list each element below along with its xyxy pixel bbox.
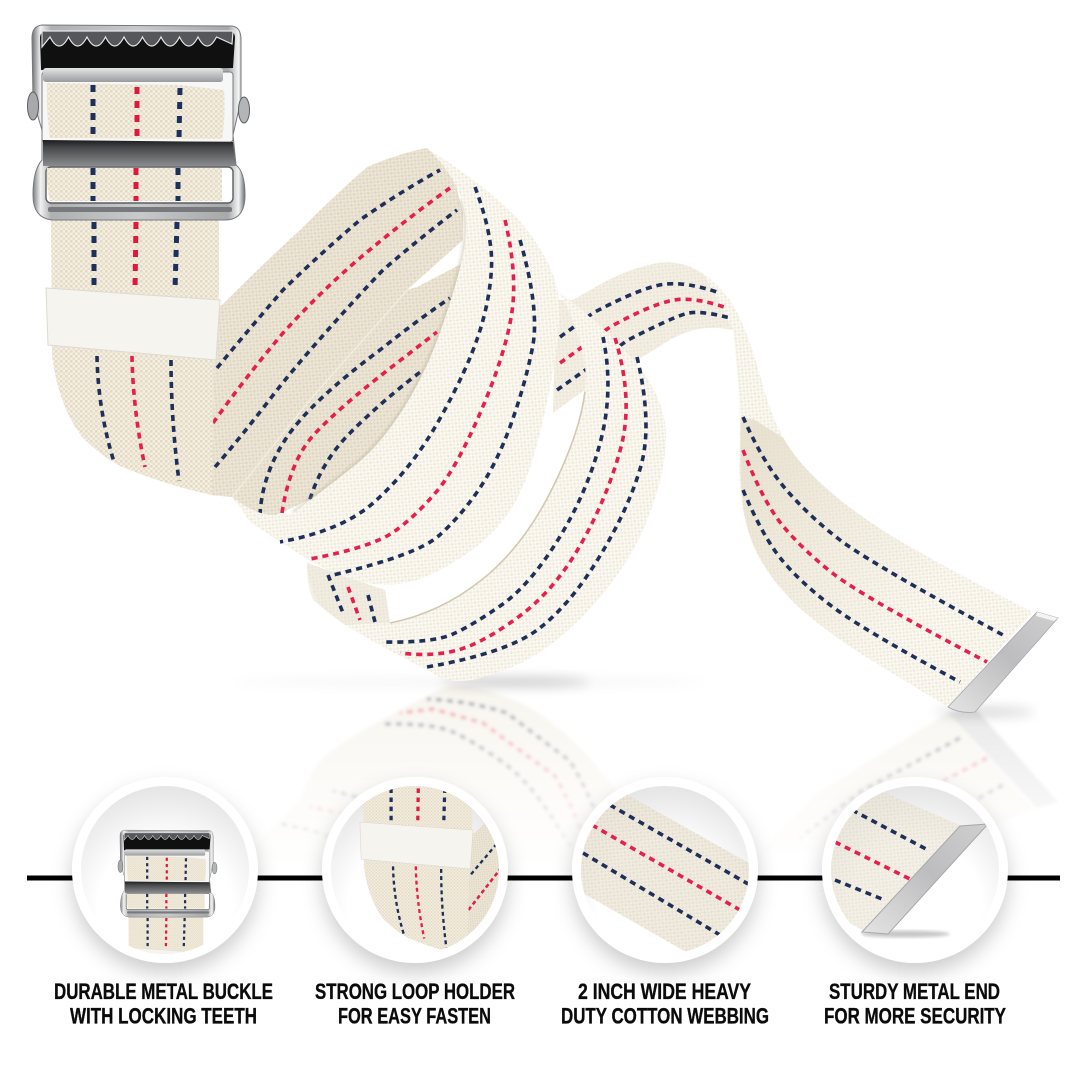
horizontal black rule	[27, 876, 1060, 880]
feature circle: metal buckle	[63, 786, 267, 982]
caption: strong loop holder: FOR EASY FASTEN	[338, 1004, 491, 1028]
belt front loop	[210, 148, 559, 585]
caption: metal end: FOR MORE SECURITY	[824, 1004, 1006, 1028]
caption: durable metal buckle: DURABLE METAL BUCKLE	[54, 979, 273, 1004]
caption: strong loop holder: STRONG LOOP HOLDER	[315, 979, 515, 1004]
floor reflection of belt	[282, 686, 1054, 837]
feature circle: loop holder	[313, 786, 517, 982]
feature circle: cotton webbing	[560, 777, 770, 963]
caption: strong loop holder	[315, 979, 515, 1028]
ground shadow under loop	[440, 678, 590, 686]
belt far section and metal tip	[553, 262, 1058, 712]
ground shadow under metal tip	[935, 709, 1035, 715]
caption: metal end	[824, 979, 1006, 1028]
caption: cotton webbing: DUTY COTTON WEBBING	[561, 1004, 769, 1028]
belt inner band	[232, 263, 470, 525]
strap with elastic loop holder	[46, 218, 220, 495]
belt lower loop	[307, 293, 666, 681]
caption: cotton webbing	[561, 979, 769, 1028]
feature circle: metal end	[810, 777, 1008, 963]
caption: metal end: STURDY METAL END	[829, 979, 1000, 1004]
caption: durable metal buckle: WITH LOCKING TEETH	[70, 1004, 257, 1028]
main belt product image	[28, 25, 1058, 712]
caption: cotton webbing: 2 INCH WIDE HEAVY	[578, 979, 751, 1004]
caption: durable metal buckle	[54, 979, 273, 1028]
wide faint ground shadow	[230, 679, 710, 685]
metal buckle	[28, 25, 250, 220]
